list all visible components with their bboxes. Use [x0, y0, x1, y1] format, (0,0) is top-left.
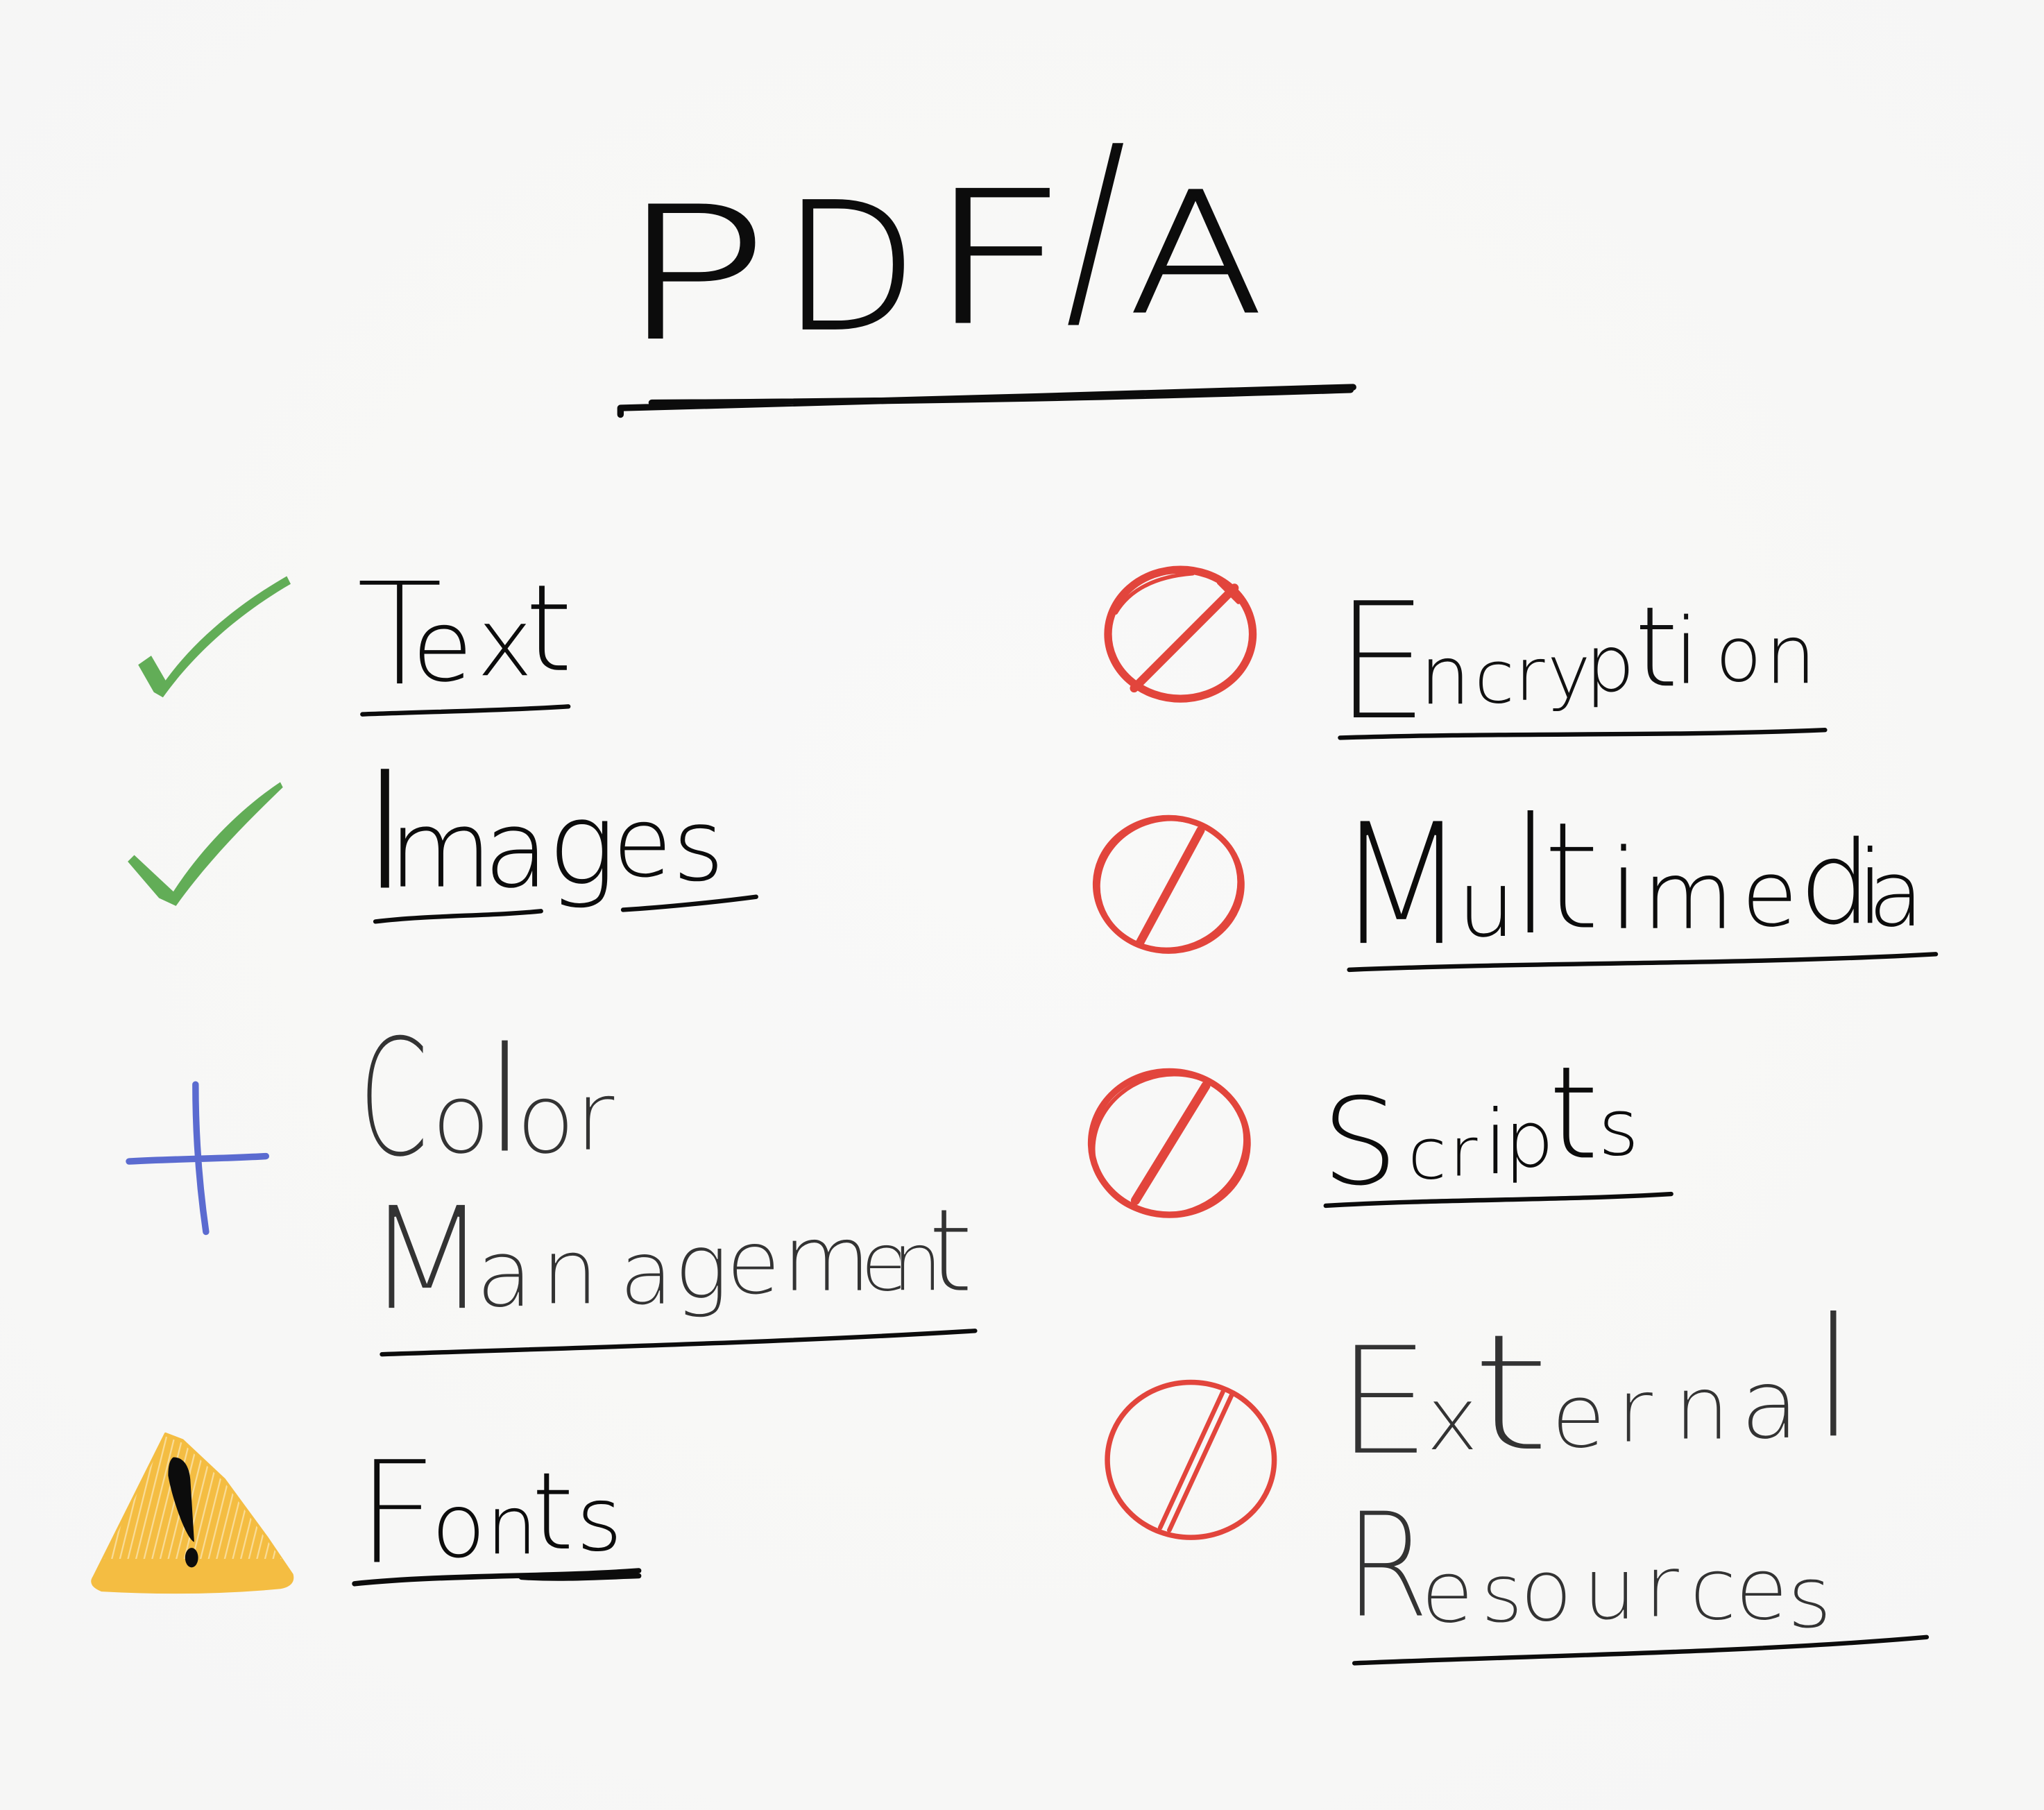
- label: External Resources: R: [1344, 1481, 1430, 1651]
- item: Images (allowed): [128, 737, 756, 927]
- label: External Resources: n: [1673, 1357, 1730, 1460]
- label: Fonts: s: [576, 1468, 622, 1571]
- label: Encryption: y: [1547, 629, 1590, 715]
- label: Multimedia: l: [1508, 783, 1553, 972]
- label: Color Management: e: [726, 1211, 781, 1315]
- icon: red prohibition sign: [1073, 1053, 1266, 1236]
- underline: [382, 1331, 975, 1354]
- label: Encryption: n: [1420, 630, 1471, 724]
- label: Encryption: i: [1673, 599, 1699, 706]
- label: Multimedia: e: [1741, 842, 1798, 948]
- label: Fonts: F: [356, 1430, 438, 1597]
- label: Fonts: o: [432, 1474, 486, 1578]
- label: Color Management: e: [860, 1216, 910, 1310]
- label: Scripts: r: [1449, 1113, 1478, 1193]
- label: Fonts: t: [532, 1450, 574, 1574]
- label: Images: s: [672, 787, 724, 903]
- label: Text: e: [412, 588, 473, 704]
- label: External Resources: e: [1735, 1540, 1788, 1640]
- label: Color Management: C: [359, 1005, 429, 1194]
- label: Multimedia: M: [1335, 786, 1468, 984]
- label: External Resources: s: [1787, 1548, 1832, 1648]
- label: Multimedia: u: [1458, 852, 1515, 958]
- label: Scripts: c: [1408, 1113, 1447, 1195]
- label: Color Management: o: [432, 1063, 491, 1175]
- label: Images: m: [389, 788, 493, 912]
- item: Fonts (warning): [92, 1430, 639, 1597]
- label: External Resources: r: [1644, 1537, 1679, 1637]
- label: Color Management: t: [928, 1184, 973, 1317]
- item: Scripts (forbidden): [1073, 1039, 1671, 1236]
- icon: green check: [128, 782, 283, 906]
- item: Encryption (forbidden): [1108, 567, 1825, 757]
- item: Text (allowed): [138, 551, 572, 718]
- label: Images: e: [613, 787, 672, 899]
- title text: F: [927, 153, 1069, 366]
- label: External Resources: a: [1740, 1348, 1799, 1460]
- label: External Resources: E: [1336, 1314, 1431, 1489]
- label: Multimedia: m: [1642, 841, 1734, 950]
- icon: red prohibition sign: [1087, 807, 1251, 962]
- label: Encryption: c: [1474, 635, 1515, 720]
- icon: blue plus: [129, 1084, 266, 1232]
- label: External Resources: s: [1481, 1547, 1523, 1641]
- label: Scripts: s: [1598, 1082, 1639, 1174]
- underline: [1340, 730, 1825, 737]
- item: Color Management (added): [129, 1005, 975, 1354]
- label: External Resources: e: [1421, 1542, 1474, 1642]
- label: External Resources: o: [1520, 1541, 1573, 1641]
- label: External Resources: l: [1811, 1281, 1857, 1476]
- title text: A: [1129, 157, 1263, 351]
- label: Multimedia: t: [1542, 789, 1601, 964]
- label: Color Management: n: [892, 1216, 943, 1310]
- label: Multimedia: i: [1608, 826, 1640, 955]
- label: Color Management: M: [365, 1175, 488, 1342]
- label: Color Management: r: [575, 1060, 615, 1172]
- label: Encryption: r: [1515, 632, 1545, 717]
- label: Encryption: p: [1585, 618, 1635, 710]
- label: Text: x: [477, 588, 533, 697]
- title underline: [620, 387, 1353, 414]
- label: Color Management: g: [674, 1214, 729, 1320]
- icon: yellow warning triangle: [92, 1431, 295, 1592]
- underline: [1349, 954, 1936, 970]
- label: Images: I: [361, 737, 409, 927]
- label: Multimedia: d: [1799, 817, 1872, 950]
- label: Fonts: n: [486, 1480, 538, 1573]
- label: Images: g: [547, 778, 616, 911]
- label: External Resources: r: [1617, 1360, 1653, 1463]
- label: Encryption: t: [1635, 583, 1678, 712]
- label: External Resources: x: [1426, 1367, 1479, 1471]
- label: Multimedia: a: [1868, 842, 1924, 948]
- label: External Resources: e: [1551, 1365, 1606, 1469]
- label: Scripts: S: [1322, 1073, 1398, 1212]
- label: Images: a: [484, 788, 549, 912]
- title text: /: [1066, 101, 1125, 356]
- underline: [362, 706, 568, 715]
- label: Text: T: [356, 551, 443, 718]
- label: Scripts: t: [1549, 1039, 1599, 1188]
- label: Encryption: o: [1716, 611, 1762, 699]
- icon: red prohibition sign: [1107, 1383, 1275, 1537]
- label: Color Management: a: [476, 1219, 534, 1329]
- underline: [375, 897, 756, 921]
- title text: P: [619, 169, 769, 382]
- label: External Resources: c: [1689, 1540, 1737, 1640]
- label: Encryption: n: [1765, 609, 1816, 703]
- label: Text: t: [525, 559, 572, 699]
- label: Color Management: m: [782, 1206, 871, 1313]
- label: Color Management: a: [619, 1222, 674, 1325]
- underline: [1354, 1637, 1927, 1663]
- label: Color Management: o: [516, 1063, 575, 1175]
- label: Color Management: n: [541, 1220, 599, 1326]
- icon: red prohibition sign: [1108, 570, 1253, 699]
- label: Multimedia: i: [1856, 828, 1884, 947]
- underline: [355, 1571, 639, 1584]
- label: External Resources: t: [1470, 1299, 1551, 1488]
- label: Encryption: E: [1335, 567, 1429, 757]
- underline: [1326, 1194, 1671, 1206]
- label: Scripts: i: [1483, 1091, 1508, 1195]
- title text: D: [782, 165, 918, 370]
- icon: green check: [138, 576, 291, 697]
- label: External Resources: u: [1583, 1540, 1637, 1640]
- item: External Resources (forbidden): [1107, 1281, 1927, 1663]
- label: Color Management: l: [485, 1016, 525, 1186]
- item: Multimedia (forbidden): [1087, 783, 1936, 984]
- label: Scripts: p: [1504, 1094, 1554, 1186]
- title: PDF/A: [619, 101, 1353, 414]
